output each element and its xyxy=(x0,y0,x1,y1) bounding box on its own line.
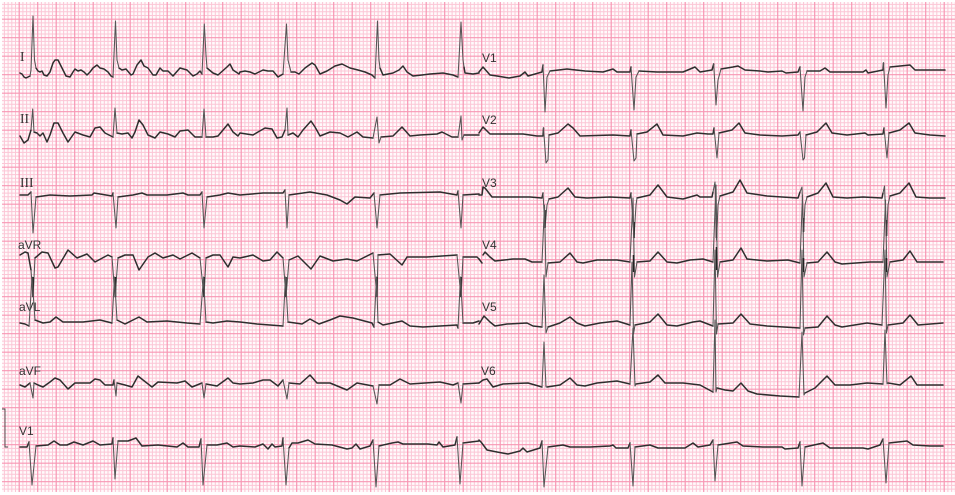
lead V3 (right column) xyxy=(479,176,945,240)
trace: lead V2 xyxy=(479,123,945,163)
trace: lead aVF xyxy=(20,375,479,404)
trace: lead aVR xyxy=(20,250,479,297)
lead I (left column) xyxy=(20,16,479,78)
label: V2: V2 xyxy=(482,113,497,127)
lead V1 (right column) xyxy=(479,51,945,112)
calibration bracket xyxy=(2,409,8,447)
label: aVF: aVF xyxy=(19,364,41,378)
lead V2 (right column) xyxy=(479,113,945,163)
lead aVL (left column) xyxy=(19,277,479,328)
trace: lead III xyxy=(20,190,479,233)
label: V3: V3 xyxy=(482,176,497,190)
lead V4 (right column) xyxy=(479,185,943,277)
lead V6 (right column) xyxy=(479,320,943,397)
trace: lead V1 xyxy=(479,63,945,112)
trace: lead II xyxy=(20,108,479,143)
label: V1: V1 xyxy=(482,51,497,65)
lead V1 rhythm strip (left) xyxy=(19,424,479,487)
trace: lead I xyxy=(20,16,479,78)
trace: lead V5 xyxy=(479,250,943,335)
label: aVL: aVL xyxy=(19,300,41,314)
label: V5: V5 xyxy=(482,300,497,314)
trace: lead V3 xyxy=(479,180,945,240)
lead III (left column) xyxy=(20,175,479,233)
lead II (left column) xyxy=(20,108,479,143)
lead aVR (left column) xyxy=(18,238,479,297)
label: I: I xyxy=(20,49,25,64)
trace: lead V4 xyxy=(479,185,943,277)
label: V1 rhythm: V1 xyxy=(19,424,34,438)
lead aVF (left column) xyxy=(19,364,479,404)
label: V6: V6 xyxy=(481,364,496,378)
label: V4: V4 xyxy=(482,238,497,252)
trace: lead V6 xyxy=(479,320,943,397)
label: III: III xyxy=(20,175,34,190)
lead V5 (right column) xyxy=(479,250,943,335)
trace: V1 rhythm right xyxy=(479,439,943,487)
trace: V1 rhythm left xyxy=(20,437,479,487)
trace: lead aVL xyxy=(20,277,479,328)
label: II: II xyxy=(20,111,29,126)
lead V1 rhythm strip (right) xyxy=(479,439,943,487)
label: aVR: aVR xyxy=(18,238,42,252)
